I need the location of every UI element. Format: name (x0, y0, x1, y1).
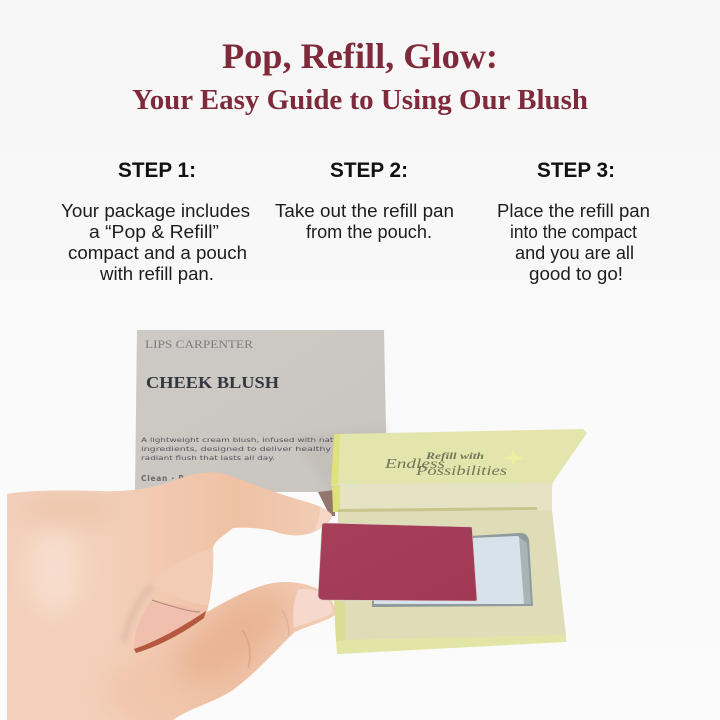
step 2 heading: STEP 2: (330, 159, 408, 182)
step 3 description: into the compact (510, 222, 637, 242)
step 3 description (497, 201, 650, 284)
step 1 description: with refill pan. (99, 264, 214, 284)
package card: Clean · Re (141, 474, 190, 483)
empty pan well (372, 533, 533, 607)
lid lettering (384, 451, 508, 479)
step 3 heading: STEP 3: (537, 159, 615, 182)
hand (7, 472, 335, 720)
package card: radiant flush that lasts all day. (141, 454, 275, 462)
lid lettering: Endless (384, 457, 446, 472)
title: Pop, Refill, Glow: (222, 36, 498, 76)
step 2 description: Take out the refill pan (275, 201, 454, 221)
step 2 column (275, 159, 454, 242)
step 1 description: compact and a pouch (68, 243, 247, 263)
package card: ingredients, designed to deliver healthy (141, 445, 331, 453)
step 3 description: Place the refill pan (497, 201, 650, 221)
step 3 column (497, 159, 650, 284)
lid lettering: Possibilities (415, 464, 508, 479)
step 2 description (275, 201, 454, 242)
compact hinge (333, 483, 552, 511)
step 1 description (61, 201, 250, 284)
compact base (337, 510, 566, 654)
step 1 description: a “Pop & Refill” (89, 222, 219, 242)
step 1 description: Your package includes (61, 201, 250, 221)
package card (135, 330, 386, 492)
compact (331, 429, 587, 654)
step 1 column (61, 159, 250, 284)
package card: A lightweight cream blush, infused with natu (141, 436, 339, 444)
step 1 heading: STEP 1: (118, 159, 196, 182)
blush refill pan (318, 523, 477, 601)
hand shading (20, 498, 333, 720)
compact lid (334, 429, 587, 487)
lid lettering: Refill with (425, 451, 484, 461)
title (132, 36, 588, 116)
step 3 description: good to go! (529, 264, 623, 284)
package card: CHEEK BLUSH (146, 373, 279, 392)
package card: LIPS CARPENTER (145, 339, 253, 351)
step 3 description: and you are all (515, 243, 634, 263)
step 2 description: from the pouch. (306, 222, 432, 242)
subtitle: Your Easy Guide to Using Our Blush (132, 85, 588, 116)
product photo (7, 330, 587, 720)
